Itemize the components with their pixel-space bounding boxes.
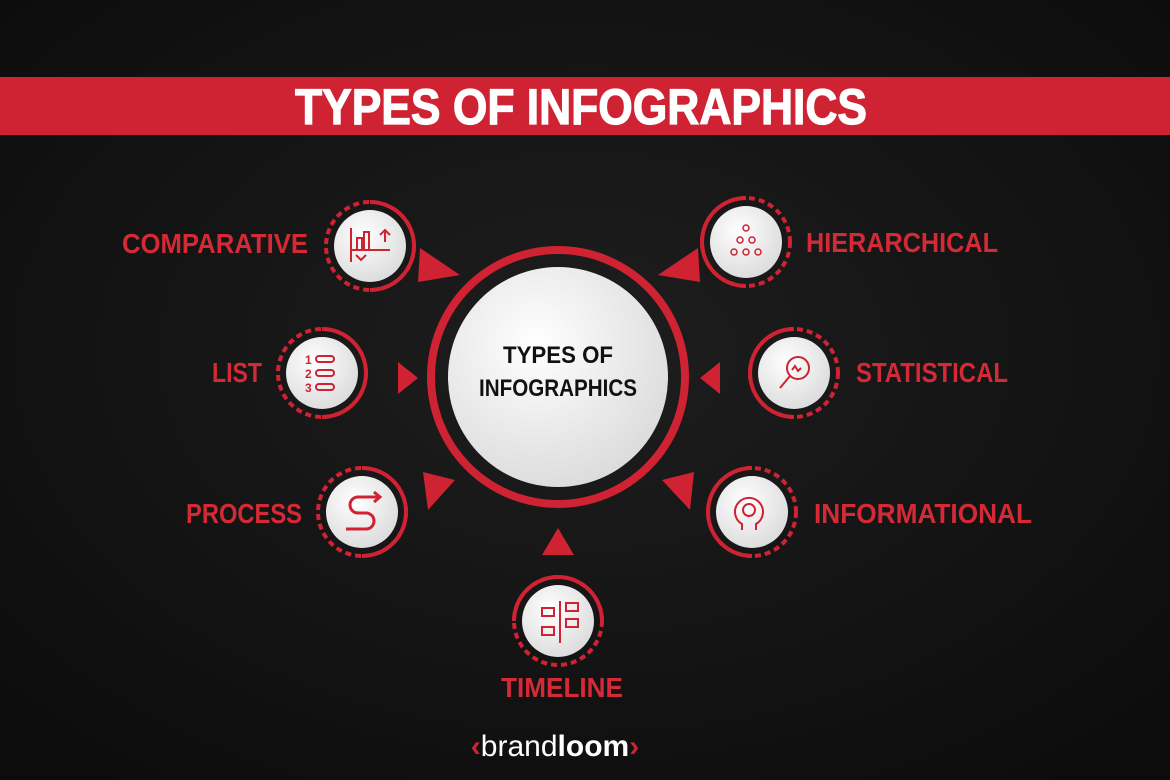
- node: comparative: [122, 202, 414, 290]
- title bar: TYPES OF INFOGRAPHICS: [295, 79, 867, 135]
- central hub: TYPES OF: [503, 342, 613, 369]
- node: list: 3: [305, 381, 312, 395]
- arrows pointing to hub: [398, 248, 720, 555]
- node: statistical: STATISTICAL: [856, 357, 1008, 388]
- central hub: [431, 250, 685, 504]
- node: list: LIST: [212, 357, 262, 388]
- logo: brandloom: ‹brandloom›: [471, 730, 639, 763]
- node: timeline: [501, 577, 623, 703]
- node: process: [186, 468, 406, 556]
- node: statistical: [750, 329, 1008, 417]
- central hub: INFOGRAPHICS: [479, 375, 637, 402]
- node: list: 2: [305, 367, 312, 381]
- node: hierarchical: [702, 198, 998, 286]
- node: hierarchical: HIERARCHICAL: [806, 227, 998, 258]
- node: informational: [708, 468, 1032, 556]
- node: comparative: COMPARATIVE: [122, 228, 308, 259]
- title bar: [0, 77, 1170, 135]
- node: list: [212, 329, 366, 417]
- node: timeline: TIMELINE: [501, 672, 623, 703]
- node: list: 1: [305, 353, 312, 367]
- node: informational: INFORMATIONAL: [814, 498, 1032, 529]
- node: process: PROCESS: [186, 498, 302, 529]
